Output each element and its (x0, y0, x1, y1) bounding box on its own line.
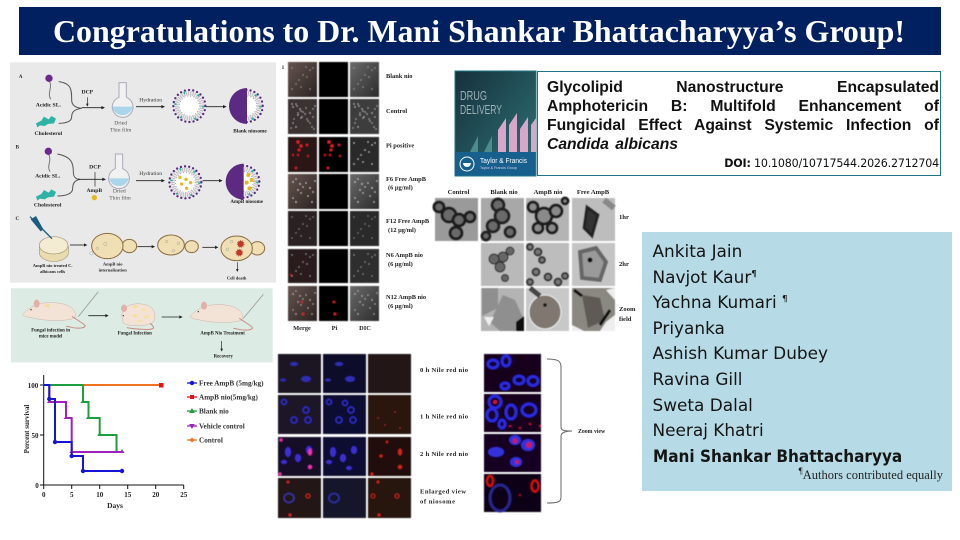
row C: AmpB niosome uptake by cells: AmpB nio treated C. (33, 263, 73, 268)
row A: blank niosome preparation (19, 75, 267, 137)
title banner: Congratulations to Dr. Mani Shankar Bhattacharyya’s Group! (53, 14, 905, 49)
author list: Neeraj Khatri (652, 420, 764, 440)
axis labels: 10 (96, 491, 104, 499)
labels: Nile red: Enlarged view (420, 488, 466, 496)
labels: Nile red: 2 h Nile red nio (420, 451, 469, 458)
row B: AmpB niosome preparation: Hydration (139, 171, 162, 177)
labels: TEM: Control (448, 189, 470, 196)
axis labels: 0 (35, 482, 39, 490)
row B: AmpB niosome preparation: AmpB (86, 188, 102, 194)
row A: blank niosome preparation: Blank niosome (233, 129, 267, 135)
row B: AmpB niosome preparation: DCP (89, 165, 101, 171)
row C: AmpB niosome uptake by cells (16, 216, 265, 281)
labels: TEM (448, 189, 636, 323)
labels: TEM: AmpB nio (534, 189, 563, 196)
journal cover (455, 71, 536, 176)
TEM row: 2hr (481, 243, 615, 286)
labels: PI microscopy: (6 μg/ml) (388, 184, 413, 192)
labels: PI microscopy: Merge (293, 325, 311, 332)
bracket: zoom view (547, 359, 572, 503)
row B: AmpB niosome preparation: B (16, 146, 20, 151)
cover title: DRUG (460, 88, 487, 103)
TEM row: 1hr (434, 198, 615, 241)
labels: PI microscopy: Pi (332, 325, 338, 332)
row B: AmpB niosome preparation: Cholesterol (34, 203, 62, 209)
author list: Ashish Kumar Dubey (652, 343, 828, 363)
paper title and DOI: Amphotericin B: Multifold Enhancement of (547, 98, 939, 115)
labels: PI microscopy: (6 μg/ml) (388, 261, 413, 268)
journal cover: Taylor & Francis Group (480, 166, 517, 170)
author list: Yachna Kumari ¶ (652, 292, 788, 312)
row: PI positive (288, 137, 379, 172)
axis labels: 15 (124, 491, 132, 499)
paper title and DOI: Candida albicans (547, 136, 678, 153)
panel: mouse infection model: mice model (39, 335, 63, 340)
curve: blank nio (44, 385, 125, 453)
Nile row: 0 h (278, 354, 411, 393)
labels: PI microscopy: Pi positive (386, 142, 414, 150)
panel: TEM image grid (434, 198, 615, 331)
labels: PI microscopy: (6 μg/ml) (388, 303, 413, 310)
row C: AmpB niosome uptake by cells: C (16, 217, 20, 222)
labels: Nile red: 0 h Nile red nio (420, 367, 469, 374)
row: F6 free AmpB (288, 174, 379, 209)
row A: blank niosome preparation: Dried (114, 120, 127, 126)
author list: Ankita Jain (652, 241, 742, 261)
legend (187, 380, 264, 444)
labels: Nile red (420, 367, 606, 506)
labels: TEM: Zoom (619, 306, 636, 313)
axis labels (23, 382, 188, 510)
row B: AmpB niosome preparation: Thin film (109, 195, 131, 202)
row: N12 AmpB nio (288, 286, 379, 321)
cover title: DELIVERY (460, 102, 502, 117)
labels: Nile red: 1 h Nile red nio (420, 414, 469, 420)
labels: PI microscopy: Blank nio (386, 73, 412, 80)
labels: PI microscopy: DIC (359, 325, 371, 332)
labels: PI microscopy: N12 AmpB nio (386, 294, 426, 301)
legend: Control (199, 436, 223, 444)
legend: AmpB nio(5mg/kg) (199, 394, 259, 402)
panel: mouse infection model (11, 288, 273, 362)
axis labels: Days (107, 501, 123, 510)
axis labels: 20 (152, 491, 160, 499)
Nile row: enlarged view (278, 478, 411, 518)
author list: Navjot Kaur¶ (652, 267, 757, 287)
Nile zoom view column (484, 354, 541, 512)
labels: PI microscopy: F12 Free AmpB (386, 218, 430, 225)
axis labels: 5 (70, 491, 74, 499)
curve: vehicle control (44, 385, 125, 453)
labels: PI microscopy: Control (386, 108, 407, 115)
row B: AmpB niosome preparation: AmpB niosome (230, 200, 264, 205)
labels: TEM: 2hr (619, 261, 629, 268)
author list: Mani Shankar Bhattacharyya (652, 446, 902, 466)
labels: Nile red: Zoom view (578, 429, 606, 435)
paper title and DOI: DOI: 10.1080/10717544.2026.2712704 (724, 157, 939, 170)
panel: Nile red confocal grid (278, 354, 541, 518)
cover title (460, 88, 502, 117)
labels: PI microscopy: N6 AmpB nio (386, 252, 423, 259)
panel: mouse infection model: Recovery (214, 355, 234, 360)
axis labels: Percent survival (23, 405, 31, 453)
author list: Sweta Dalal (652, 395, 753, 415)
row: control (288, 99, 379, 134)
row A: blank niosome preparation: Hydration (139, 98, 162, 104)
row: N6 AmpB nio (288, 249, 379, 283)
marker: AmpB nio (159, 383, 164, 388)
legend: Vehicle control (199, 422, 245, 430)
row C: AmpB niosome uptake by cells: Cell death (227, 276, 247, 281)
labels: PI microscopy: F6 Free AmpB (386, 176, 427, 183)
row B: AmpB niosome preparation (16, 146, 264, 209)
journal cover: Taylor & Francis (480, 158, 527, 165)
panel: PI confocal microscopy grid (288, 62, 379, 321)
axis labels: 50 (32, 432, 39, 440)
labels: TEM: 1hr (619, 214, 629, 221)
curve: free AmpB (44, 385, 124, 473)
row C: AmpB niosome uptake by cells: internalization (99, 267, 127, 272)
legend: Blank nio (199, 408, 229, 416)
title banner (19, 7, 941, 55)
chart: survival curve (23, 375, 264, 510)
row A: blank niosome preparation: A (19, 75, 23, 80)
labels: TEM: field (619, 316, 632, 323)
labels: TEM: Free AmpB (577, 189, 610, 196)
row A: blank niosome preparation: Acidic SL. (36, 103, 61, 109)
axis labels: 100 (28, 382, 39, 390)
labels: PI microscopy (282, 66, 430, 332)
paper title and DOI: Glycolipid Nanostructure Encapsulated (547, 79, 939, 96)
axis labels: 25 (180, 491, 188, 499)
axis labels: 0 (42, 491, 46, 499)
panel: mouse infection model: AmpB Nio Treatment (200, 332, 245, 337)
row A: blank niosome preparation: Cholesterol (35, 131, 63, 137)
panel: niosome preparation schematic (10, 62, 276, 283)
Nile row: 1 h (278, 395, 411, 434)
row B: AmpB niosome preparation: Dried (113, 189, 126, 195)
row B: AmpB niosome preparation: Acidic SL. (35, 173, 61, 179)
axes (40, 375, 184, 489)
TEM row: zoom field (481, 288, 615, 331)
cover graphic (470, 113, 536, 152)
paper title and DOI: Fungicidal Effect Against Systemic Infection of (547, 117, 939, 134)
paper title and DOI (537, 71, 941, 176)
author list: Ravina Gill (652, 369, 742, 389)
publisher banner (456, 152, 535, 176)
row A: blank niosome preparation: Thin film (110, 126, 132, 133)
author list: ¶Authors contributed equally (799, 466, 943, 482)
row: F12 free AmpB (288, 211, 379, 246)
row C: AmpB niosome uptake by cells: albicans cells (40, 269, 65, 274)
author list (642, 232, 952, 491)
labels: PI microscopy: (12 μg/ml) (388, 227, 416, 234)
row A: blank niosome preparation: DCP (82, 89, 94, 95)
labels: Nile red: of niosome (420, 498, 455, 506)
curve: control (44, 384, 161, 386)
row C: AmpB niosome uptake by cells: AmpB nio (103, 261, 123, 266)
author list: Priyanka (652, 318, 725, 338)
labels: PI microscopy: I (282, 66, 284, 71)
legend: Free AmpB (5mg/kg) (199, 380, 264, 388)
panel: mouse infection model: Fungal infection in (31, 329, 70, 334)
panel: mouse infection model: Fungal Infection (118, 332, 152, 337)
row: blank nio (288, 62, 379, 97)
Nile row: 2 h (278, 437, 411, 476)
labels: TEM: Blank nio (490, 189, 518, 196)
